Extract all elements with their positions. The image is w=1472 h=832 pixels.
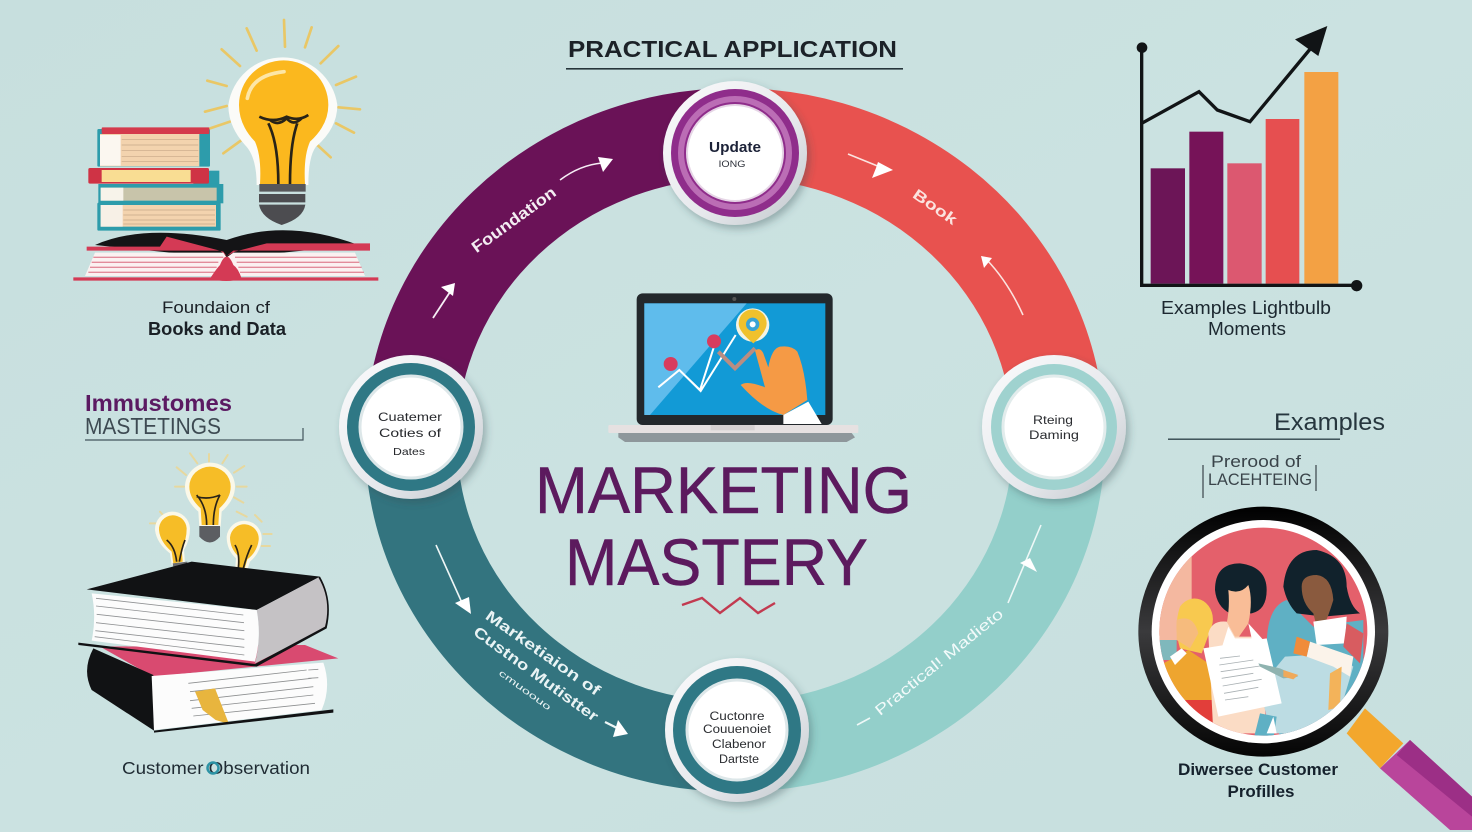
caption: foundation of books and data: Foundaion cf [162,298,270,317]
magnifier lens frame [1138,507,1388,757]
ring label: foundation: Foundation [469,184,560,257]
node: rating learning: Daming [1029,430,1079,442]
title: marketing mastery: MARKETING [535,453,912,527]
node: customer collaboration [665,658,809,802]
trend arrow [1142,26,1327,123]
title: marketing mastery [535,453,912,599]
ring label: customer text block: Marketiaion of [482,607,604,700]
ring label: customer text block: cmuoouo [497,668,553,712]
heading: immustomes mastetings: MASTETINGS [85,413,221,439]
icon: open book [73,230,378,281]
magnifier handle [1347,708,1472,830]
node: customer cuties of data [339,355,483,499]
node: customer cuties of data: Dates [393,447,425,458]
bar chart bars [1151,72,1338,284]
illustration: books with big lightbulb [73,20,378,281]
icon: laptop with growth chart [608,293,858,442]
caption: foundation of books and data [148,298,287,339]
decorative zigzag under title [682,598,775,613]
caption: diverse customer profiles: Profilles [1228,782,1294,801]
circular process ring [365,88,1105,792]
node: rating learning: Rteing [1033,415,1073,427]
node: customer collaboration: Cuctonre [710,711,764,723]
heading: immustomes mastetings [85,390,303,440]
ring segment: book (red) [735,88,1105,440]
caption: examples lightbulb moments: Examples Lightbulb [1161,298,1331,318]
caption: diverse customer profiles [1178,760,1338,801]
ring arrows [433,154,1041,737]
icon: lightbulb [228,57,337,225]
ring label: book: Book [909,186,961,229]
ring label: customer text block [470,607,604,725]
illustration: closed books with three bulbs [78,453,338,733]
illustration: magnifier with customer profiles [1138,507,1472,830]
title: marketing mastery: MASTERY [565,525,868,599]
sublabel: period of marketing: Prerood of [1211,452,1301,471]
node: customer cuties of data: Coties of [379,426,442,440]
heading: examples: Examples [1274,409,1385,436]
icon: stack of books [88,127,223,231]
node: update: IONG [718,159,746,169]
lens white rim [1152,520,1375,743]
caption: foundation of books and data: Books and Data [148,319,287,339]
caption: examples lightbulb moments [1161,298,1331,339]
ring segment: practical (light teal) [735,440,1105,792]
customer profiles scene [1153,527,1373,740]
node: customer collaboration: Dartste [719,754,759,766]
caption: diverse customer profiles: Diwersee Customer [1178,760,1338,779]
sublabel: period of marketing: LACEHTEING [1208,470,1312,489]
node: rating learning [982,355,1126,499]
ring label: customer text block: Custno Mutistter [470,623,602,725]
icon: lower book [87,645,338,733]
node: customer cuties of data: Cuatemer [378,410,442,424]
icon: bulb rays [205,20,360,157]
node: update [663,81,807,225]
ring segment: customer (dark teal) [365,440,735,792]
node: update: Update [709,139,761,156]
node: customer collaboration: Clabenor [712,739,766,751]
ring segment: foundation (purple) [365,88,735,440]
title: practical application: PRACTICAL APPLICATION [568,36,897,62]
heading: immustomes mastetings: Immustomes [85,390,232,416]
caption: customer observation: Customer Observation [122,758,310,778]
chart: bars with rising arrow [1137,26,1362,291]
icon: three small bulbs [150,453,272,575]
caption: examples lightbulb moments: Moments [1208,319,1286,339]
chart axes [1137,42,1362,291]
icon: upper book [78,562,329,667]
ring label: practical: Practical! Madieto [872,605,1007,719]
node: customer collaboration: Couuenoiet [703,724,772,736]
sublabel: period of marketing [1203,452,1316,498]
